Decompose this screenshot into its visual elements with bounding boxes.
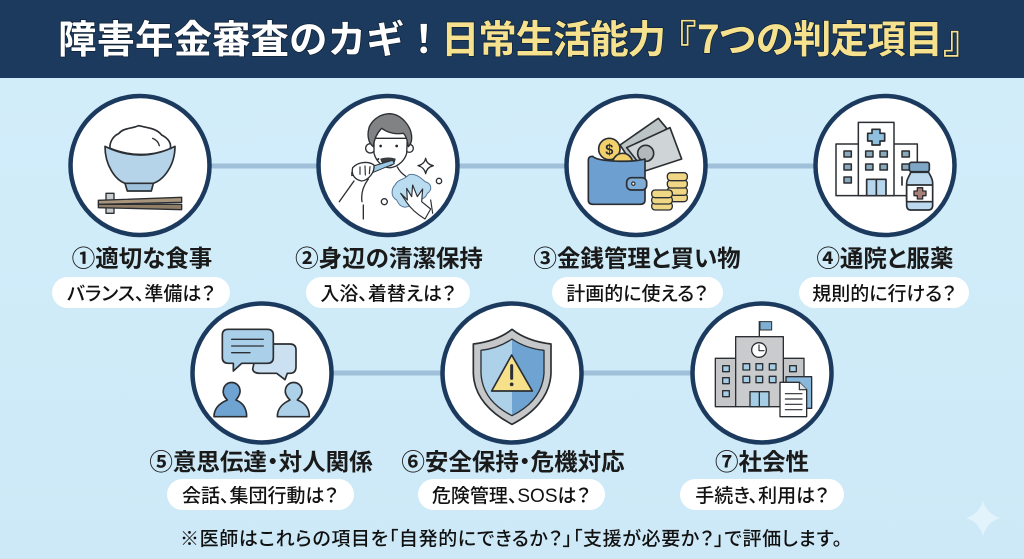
item 2 heading: ②身辺の清潔保持 [295,246,483,272]
item 2 question pill [306,277,470,308]
title banner: 障害年金審査のカギ！ [58,9,443,65]
icon: public building and documents [715,322,812,417]
icon: sparkle [966,501,1000,536]
item 7 question pill: 手続き、利用は？ [695,485,829,507]
item 4 heading: ④通院と服薬 [816,246,954,272]
item 5 heading: ⑤意思伝達・対人関係 [149,449,373,475]
title banner: 』 [943,9,982,65]
item 5: communication [192,304,332,442]
icon: person brushing teeth and washing [339,114,442,219]
item 3 question pill [552,277,723,308]
item 7 question pill [680,479,844,510]
title banner: 日常生活能力 [441,9,666,65]
title banner: 7つの判定項目 [697,9,943,65]
item 5 question pill: 会話、集団行動は？ [182,485,338,507]
icon: hospital and medicine bottle [836,122,933,210]
item 6: safety and crisis response [442,304,582,442]
item 3 heading: ③金銭管理と買い物 [533,246,741,272]
icon: shield with warning sign [473,329,551,424]
footnote: ※医師はこれらの項目を「自発的にできるか？」「支援が必要か？」で評価します。 [180,528,842,550]
title banner [0,0,1024,78]
item 1: proper meals [70,96,210,235]
item 4 question pill [799,277,969,308]
item 7: social participation [692,304,832,442]
icon: speech bubbles and two people [214,329,309,417]
item 6 question pill [418,479,605,510]
item 1 question pill [52,277,230,308]
item 6 question pill: 危険管理、SOSは？ [432,485,590,507]
item 2: personal hygiene [318,96,458,235]
icon: rice bowl and chopsticks [98,126,182,213]
item 4 question pill: 規則的に行ける？ [812,283,956,305]
title banner: 『 [658,9,697,65]
item 2 question pill: 入浴、着替えは？ [320,283,456,305]
item 7 heading: ⑦社会性 [715,449,809,475]
item 3: money management [566,96,706,235]
icon: wallet, banknotes and coins: $ [605,142,613,158]
item 1 heading: ①適切な食事 [72,246,212,272]
item 4: hospital and medication [816,96,954,235]
item 5 question pill [167,479,354,510]
item 3 question pill: 計画的に使える？ [566,283,708,305]
item 6 heading: ⑥安全保持・危機対応 [401,449,625,475]
connector line: bottom row [262,370,762,376]
connector line: top row [140,164,885,168]
item 1 question pill: バランス、準備は？ [66,283,215,305]
